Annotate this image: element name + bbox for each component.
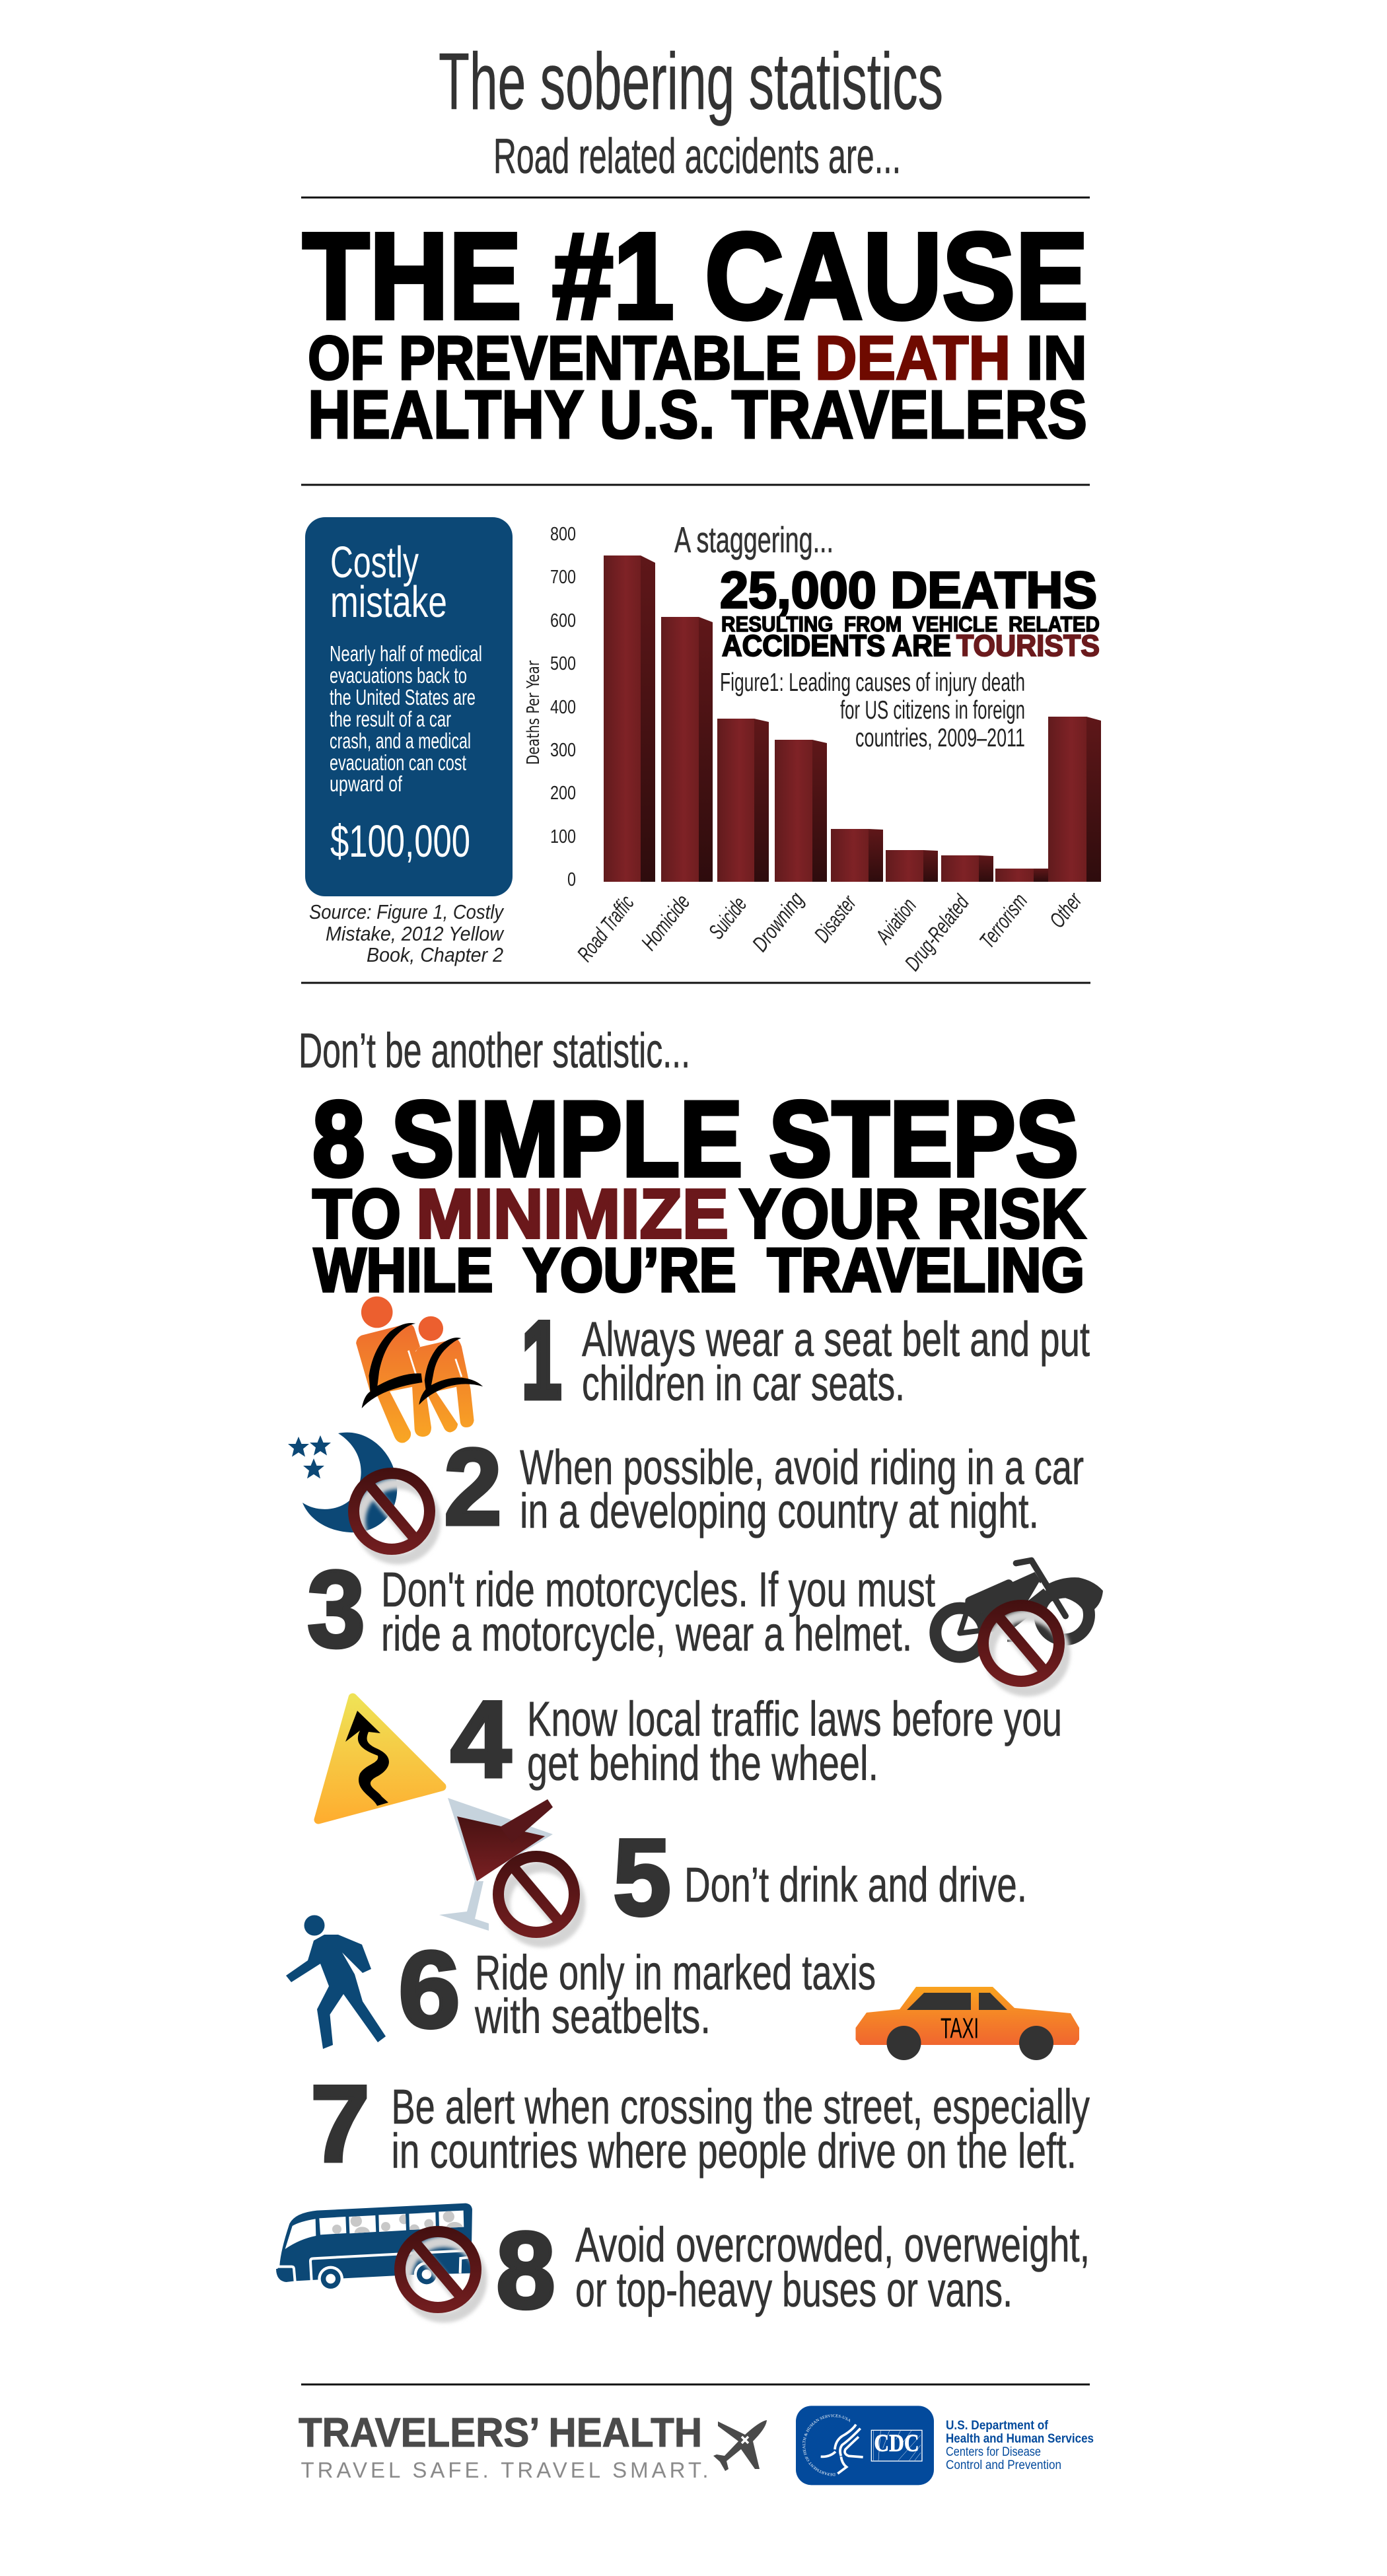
y axis labels: 400 [550,697,576,718]
heading: 8 simple steps: 8 SIMPLE STEPS [312,1079,1079,1199]
heading: the #1 cause: DEATH [815,323,1011,392]
step 4: get behind the wheel. [527,1736,878,1791]
heading: 8 simple steps: TO [312,1175,401,1253]
panel: costly mistake: Nearly half of medical [330,641,482,666]
panel: costly mistake [305,517,513,896]
step 1: children in car seats. [582,1356,905,1411]
heading: 8 simple steps: MINIMIZE [416,1175,729,1253]
step 6 [398,1929,876,2050]
y axis labels: 200 [550,783,576,804]
panel: costly mistake: $100,000 [330,816,470,867]
y axis title: Deaths Per Year [524,661,544,765]
step 8: 8 [496,2209,555,2331]
footer: HHS text [946,2419,1094,2472]
step 6: Ride only in marked taxis [475,1945,876,2000]
panel: costly mistake: evacuations back to [330,663,467,688]
figure caption: countries, 2009–2011 [855,724,1025,752]
step 2: When possible, avoid riding in a car [520,1440,1084,1495]
x axis labels: Homicide [636,890,695,954]
step 3 [307,1548,935,1670]
icon: airplane [713,2420,767,2471]
y axis labels: 100 [550,826,576,847]
panel: costly mistake: the result of a car [330,707,451,731]
step 8: or top-heavy buses or vans. [575,2262,1013,2317]
x axis labels: Suicide [703,892,752,943]
icon: seat belts [356,1297,483,1443]
source note: Book, Chapter 2 [367,943,503,966]
logo: CDC badge: CDC [874,2430,919,2457]
y axis labels: 600 [550,610,576,631]
intro line: Don’t be another statistic... [299,1023,690,1078]
footer: travelers health logo: TRAVEL SAFE. TRAVEL SMART. [301,2458,708,2482]
y axis labels: 300 [550,740,576,761]
y axis labels: 500 [550,653,576,674]
x axis labels: Drowning [747,887,808,956]
icon: pedestrian [286,1915,386,2049]
step 7: in countries where people drive on the left. [391,2124,1077,2178]
icon: taxi: TAXI [941,2012,979,2045]
heading: 8 simple steps: WHILE YOU’RE TRAVELING [314,1235,1085,1305]
step 8: Avoid overcrowded, overweight, [575,2217,1090,2272]
y axis labels [550,524,576,890]
panel: costly mistake: crash, and a medical [330,729,471,753]
x axis labels: Disaster [809,890,861,947]
step 2: 2 [444,1426,502,1548]
subtitle: Road related accidents are... [493,128,901,184]
source note: Mistake, 2012 Yellow [326,922,505,945]
step 5: Don’t drink and drive. [684,1857,1027,1912]
heading: 8 simple steps: YOUR RISK [739,1175,1086,1253]
footer: HHS text: U.S. Department of [946,2419,1049,2433]
step 1 [522,1299,1090,1421]
icon: bus with no symbol [276,2203,481,2317]
step 7 [310,2063,1090,2184]
source note: Source: Figure 1, Costly [309,900,505,923]
figure caption [720,668,1025,752]
heading: the #1 cause: OF PREVENTABLE [308,323,801,392]
callout: 25,000 deaths: ACCIDENTS ARE [722,629,951,662]
panel: costly mistake: upward of [330,771,403,796]
panel: costly mistake: evacuation can cost [330,750,466,775]
step 1: Always wear a seat belt and put [582,1312,1090,1367]
step 4 [450,1678,1062,1800]
heading: the #1 cause: IN [1026,323,1087,392]
heading: the #1 cause: HEALTHY U.S. TRAVELERS [308,376,1087,452]
x axis labels: Other [1044,887,1087,932]
source note [309,900,505,966]
callout: 25,000 deaths: A staggering... [674,519,834,560]
title: The sobering statistics [439,36,943,126]
footer: HHS text: Control and Prevention [946,2458,1061,2472]
footer: HHS text: Centers for Disease [946,2445,1041,2459]
x axis labels: Road Traffic [572,890,639,966]
panel: costly mistake: Costly [330,538,419,587]
logo: CDC badge: DEPARTMENT OF HEALTH & HUMAN SERVICES-USA [802,2414,850,2476]
icon: moon with no symbol [288,1433,435,1559]
y axis labels: 800 [550,524,576,545]
step 4: Know local traffic laws before you [527,1692,1062,1746]
footer: travelers health logo: TRAVELERS’ HEALTH [299,2410,702,2456]
x axis labels: Drug-Related [900,890,974,975]
step 5 [613,1816,1027,1938]
bar chart [524,524,1101,975]
step 5: 5 [613,1816,671,1938]
callout: 25,000 deaths: RESULTING FROM VEHICLE RELATED [721,612,1100,636]
y axis labels: 700 [550,567,576,588]
callout: 25,000 deaths: TOURISTS [956,629,1100,662]
step 3: 3 [307,1548,365,1670]
heading: 8 simple steps [312,1079,1086,1305]
step 3: ride a motorcycle, wear a helmet. [381,1606,912,1661]
step 6: with seatbelts. [474,1989,711,2044]
step 2 [444,1426,1084,1548]
x axis labels: Terrorism [974,888,1032,952]
icon: road sign [318,1698,442,1820]
figure caption: Figure1: Leading causes of injury death [720,668,1025,697]
step 1: 1 [522,1299,561,1421]
step 7: 7 [310,2063,370,2184]
icon: taxi [856,1987,1079,2060]
icon: martini with no symbol [439,1798,580,1942]
figure caption: for US citizens in foreign [840,696,1025,725]
callout: 25,000 deaths [674,519,1100,662]
bars [604,555,1101,882]
heading: the #1 cause [302,208,1088,452]
footer: travelers health logo [299,2410,708,2482]
step 3: Don't ride motorcycles. If you must [381,1562,935,1617]
logo: CDC badge [796,2406,934,2485]
x axis labels [572,887,1087,975]
panel: costly mistake: the United States are [330,685,476,709]
heading: the #1 cause: THE #1 CAUSE [302,208,1088,345]
footer: HHS text: Health and Human Services [946,2432,1094,2446]
callout: 25,000 deaths: 25,000 DEATHS [720,561,1097,619]
step 2: in a developing country at night. [520,1484,1039,1538]
step 7: Be alert when crossing the street, especially [391,2079,1090,2134]
panel: costly mistake: mistake [330,577,447,627]
y axis labels: 0 [567,869,576,890]
icon: motorcycle with no symbol [935,1560,1103,1691]
x axis labels: Aviation [871,894,921,948]
step 8 [496,2209,1090,2331]
step 6: 6 [398,1929,460,2050]
step 4: 4 [450,1678,511,1800]
